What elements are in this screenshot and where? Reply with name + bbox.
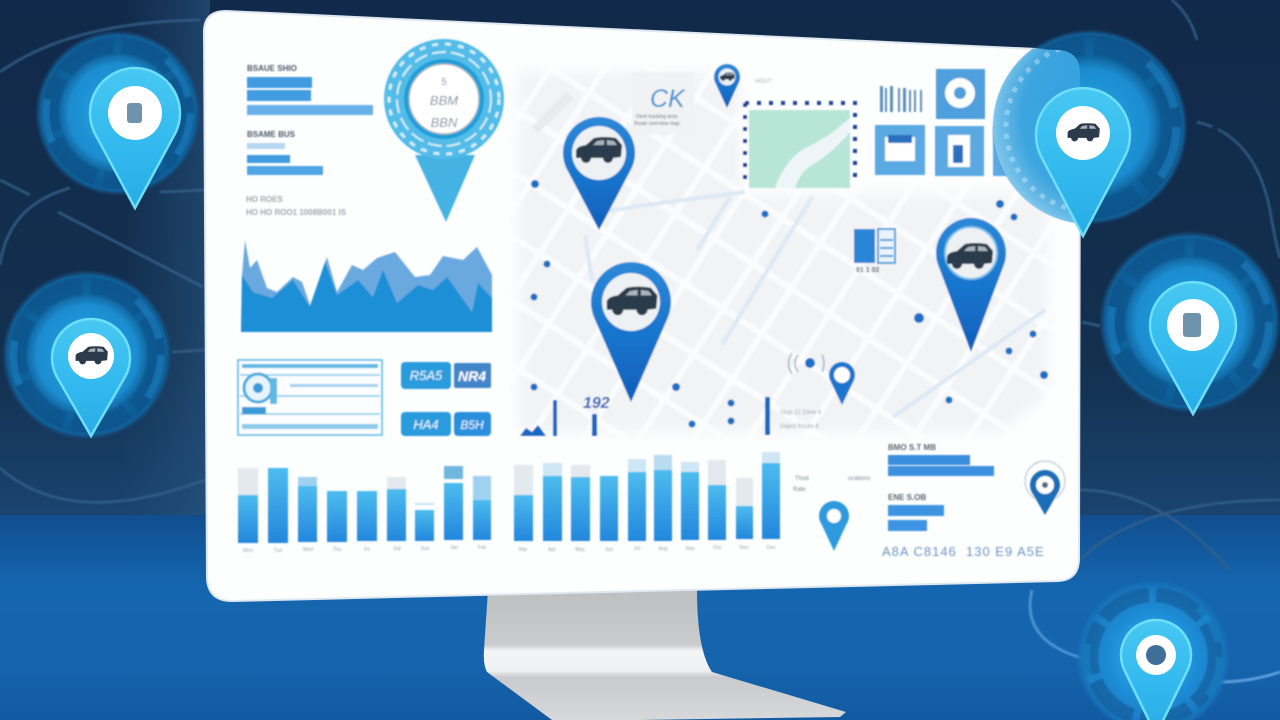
map pin: car large: [591, 262, 671, 402]
stat button: [454, 363, 491, 388]
legend note: Rate: [793, 487, 806, 493]
bar chart: left: Thu: [333, 547, 342, 553]
bar chart: middle: Sep: [686, 546, 695, 552]
small label: HOUT: [755, 79, 772, 85]
bar chart: middle: Oct: [713, 545, 721, 551]
monitor screen: [204, 11, 1080, 601]
background: soft lit area beside the monitor: [120, 0, 210, 515]
map label card: CK: [650, 85, 686, 113]
map label card: Route overview map: [634, 121, 680, 127]
floating pin: right upper: [1036, 88, 1130, 236]
panel pin: dark with signal: [1025, 461, 1065, 515]
data table: [238, 360, 382, 435]
bar chart: middle: Mar: [519, 547, 528, 553]
caption text: HO ROES: [246, 195, 284, 204]
bar chart: middle: Apr: [548, 547, 556, 553]
bar chart: middle: [514, 452, 780, 553]
map panel: [520, 64, 1049, 437]
bar chart: middle: Jun: [605, 547, 613, 553]
bar chart: middle: Jul: [634, 546, 640, 552]
halo: right middle: [1100, 232, 1280, 412]
building icon: [854, 229, 895, 274]
dashboard content: [238, 39, 1070, 559]
stat button: R5A5: [410, 368, 443, 383]
bar chart: left: Mon: [243, 548, 253, 554]
horizontal bars: bottom group: ENE S.OB: [888, 493, 926, 502]
panel pin: light blue: [819, 501, 849, 551]
stat button: HA4: [413, 417, 439, 432]
floating pin: left upper: [90, 68, 180, 208]
map pin: car upper left: [563, 117, 635, 230]
caption text: [246, 195, 347, 217]
text block: top summary: [247, 64, 373, 175]
bottom stat text: A8A C8146 130 E9 A5E: [882, 544, 1045, 559]
heading: BSAUE SHIO: [247, 64, 297, 73]
bar chart: left: Sun: [421, 546, 430, 552]
small chart on map: 192: [583, 395, 610, 412]
icon tile: partial: [992, 126, 1007, 177]
area chart: [241, 240, 492, 332]
halo: bottom right: [1077, 581, 1229, 720]
legend note: [793, 476, 870, 493]
icon tile: device: [935, 126, 984, 176]
background: dark upper wall: [0, 0, 1280, 520]
halo tint over the screen corner: [993, 30, 1187, 224]
horizontal bars: bottom group: [888, 493, 944, 531]
monitor stand: [484, 590, 846, 720]
bar chart: left: Wed: [303, 547, 313, 553]
icon tile: cloud: [936, 69, 985, 119]
bar chart: left: Jan: [450, 545, 458, 551]
horizontal bars: top group: BMO S.T MB: [888, 443, 936, 452]
bar chart: middle: Dec: [767, 545, 776, 551]
bar chart: left: Sat: [393, 546, 401, 552]
map roads: [535, 95, 1045, 417]
small legend text: Stop 12 Zone 4: [780, 410, 822, 416]
legend note: Thod: [795, 476, 809, 482]
stat button: B5H: [460, 418, 484, 432]
bar chart: left: Tue: [274, 548, 282, 554]
large cyan badge pin: [384, 39, 504, 222]
large cyan badge pin: 5: [441, 77, 447, 88]
horizontal bars: top group: [888, 443, 994, 476]
bar chart: middle: Aug: [659, 546, 668, 552]
green park with dotted boundary: [745, 103, 855, 188]
legend note: ocations: [848, 476, 870, 482]
stat button: [401, 412, 451, 436]
large cyan badge pin: BBN: [431, 115, 458, 130]
map dots: [530, 180, 1048, 428]
floating pin: bottom right: [1121, 620, 1191, 720]
halo: left lower: [3, 271, 171, 439]
bar chart: middle: May: [575, 547, 585, 553]
stat button: [454, 412, 491, 436]
halo: left upper: [36, 31, 200, 195]
map background blocks: [520, 64, 1049, 437]
right upper halo overlapping screen: [993, 30, 1187, 224]
icon tile: truck: [875, 125, 925, 175]
map label card: [632, 72, 694, 134]
large cyan badge pin: BBM: [430, 93, 458, 108]
signal icon: [788, 353, 824, 374]
floating pin: left lower: [52, 319, 130, 436]
map pin: top small: [714, 64, 740, 108]
bar chart: left: [238, 466, 491, 554]
floating pin: right middle: [1150, 282, 1236, 414]
heading: BSAME BUS: [247, 130, 296, 139]
small legend text: Depot Route 8: [780, 424, 819, 430]
bar chart: middle: Nov: [740, 545, 749, 551]
caption text: HO HO ROO1 1008B001 IS: [246, 208, 347, 217]
small legend text: [780, 410, 822, 430]
map label card: Fleet tracking area: [636, 114, 678, 120]
background: blue floor: [0, 515, 1280, 720]
bar chart: left: Fri: [364, 547, 370, 553]
building icon: 01 1 02: [856, 267, 879, 274]
bar chart: left: Feb: [478, 545, 487, 551]
small chart on map: [520, 395, 770, 436]
barcode icon: [880, 86, 922, 112]
map pin: car right: [936, 218, 1006, 352]
stat button: NR4: [458, 368, 486, 384]
stat button: [401, 362, 451, 389]
map pin: small hollow: [829, 362, 855, 405]
